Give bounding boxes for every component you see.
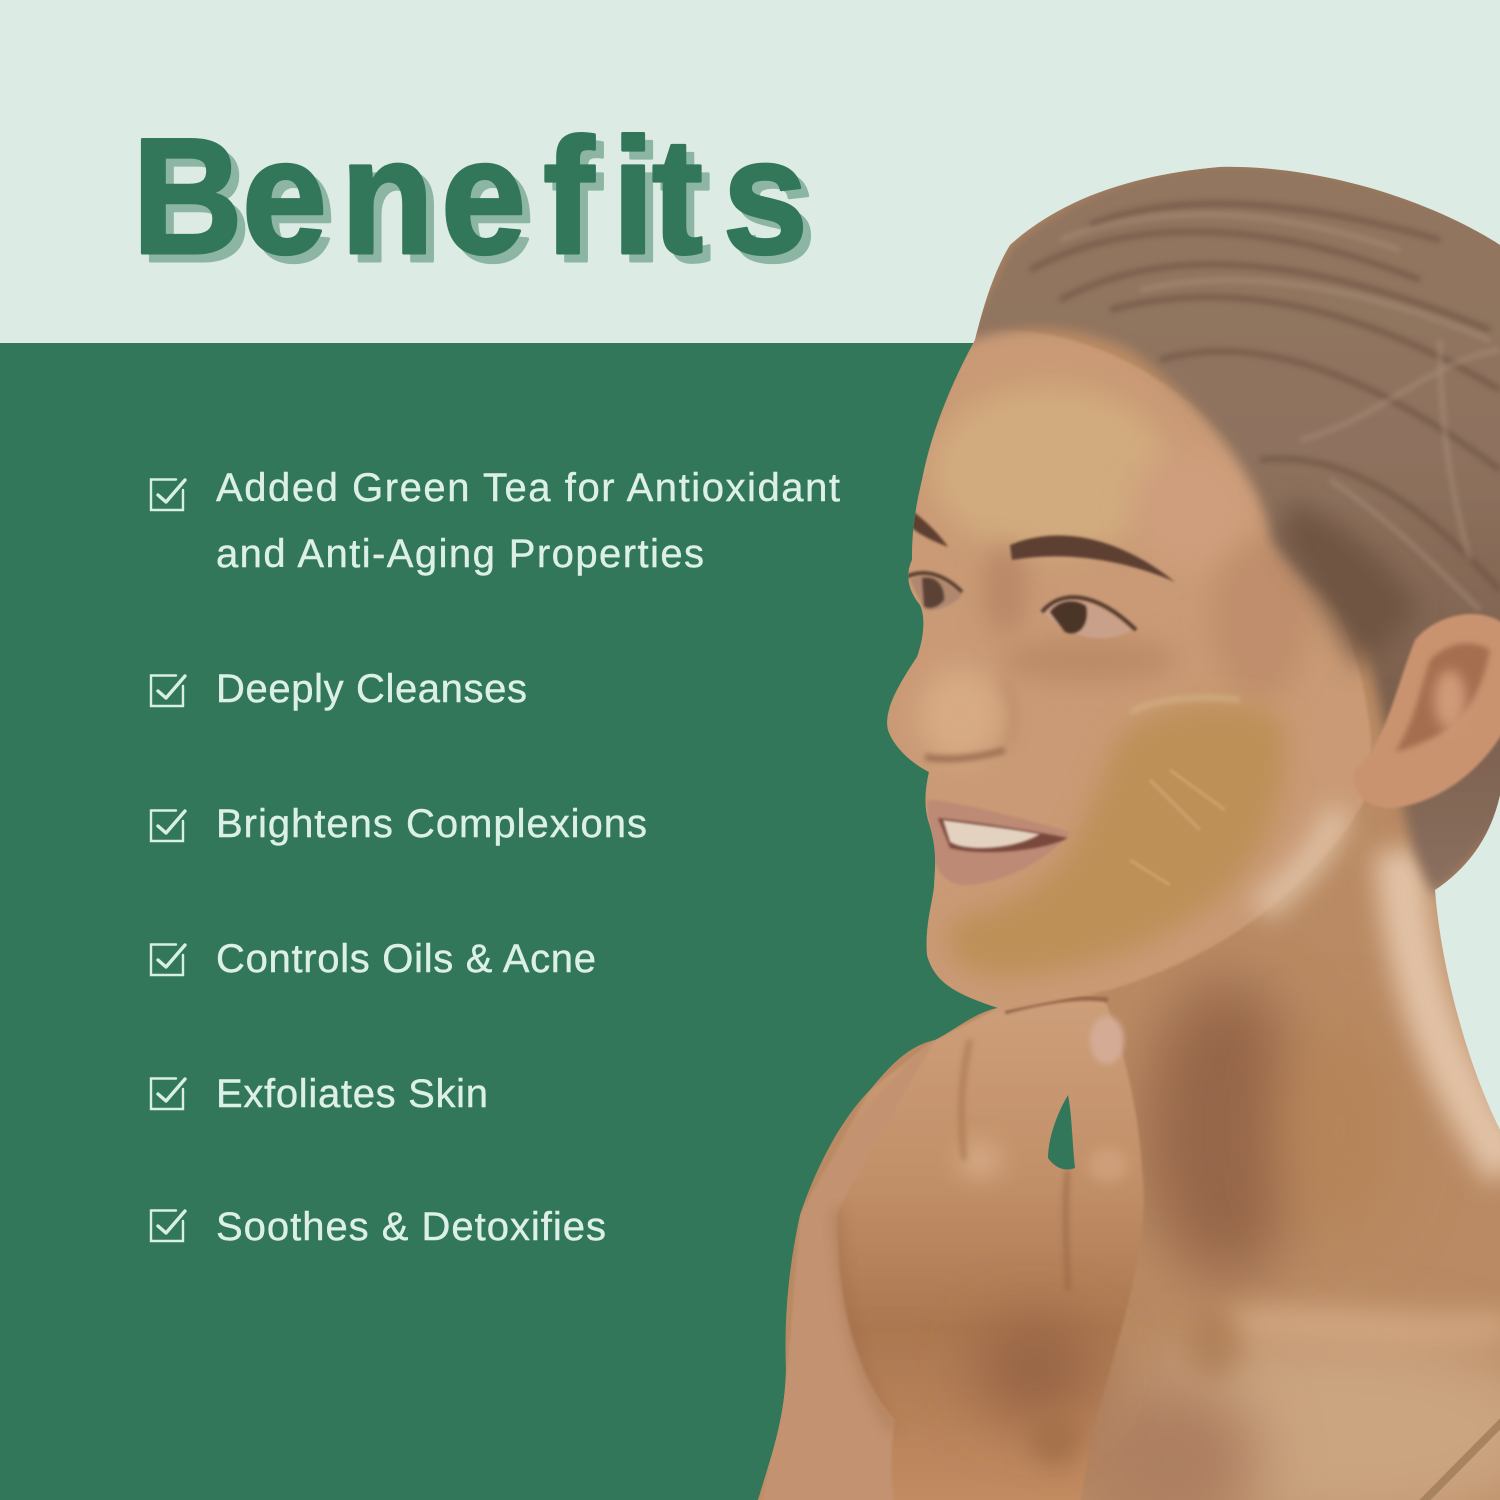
lips and teeth <box>927 800 1070 885</box>
item: exfoliates skin: Exfoliates Skin <box>216 1072 488 1116</box>
hand <box>750 992 1144 1500</box>
item: green tea: and Anti-Aging Properties <box>216 532 704 576</box>
eyebrows <box>911 510 1175 582</box>
icon: checkbox <box>151 810 185 841</box>
icon: checkbox <box>151 1210 185 1241</box>
item: green tea: Added Green Tea for Antioxidant <box>216 466 840 510</box>
icon: checkbox <box>151 676 185 706</box>
strap <box>1420 1420 1500 1500</box>
item: deeply cleanses: Deeply Cleanses <box>216 667 527 711</box>
face <box>880 329 1372 1012</box>
title: Benefits: Benefits <box>140 112 816 296</box>
finger gap <box>1048 1095 1075 1170</box>
item: soothes and detoxifies: Soothes & Detoxifies <box>216 1205 606 1249</box>
hair <box>960 160 1500 895</box>
panel: green block <box>0 343 1100 1500</box>
icon: checkbox <box>151 480 185 510</box>
eyes <box>906 573 1136 638</box>
item: controls oils and acne: Controls Oils & Acne <box>216 937 596 981</box>
benefits list <box>151 466 840 1249</box>
item: brightens complexions: Brightens Complexions <box>216 802 647 846</box>
neck and chest <box>1080 850 1500 1500</box>
woman with clay face mask <box>750 150 1500 1500</box>
icon: checkbox <box>151 944 185 975</box>
item: green tea <box>151 466 840 576</box>
title: Benefits: Benefits <box>132 104 808 288</box>
icon: checkbox <box>151 1078 185 1109</box>
ear <box>1354 614 1500 808</box>
